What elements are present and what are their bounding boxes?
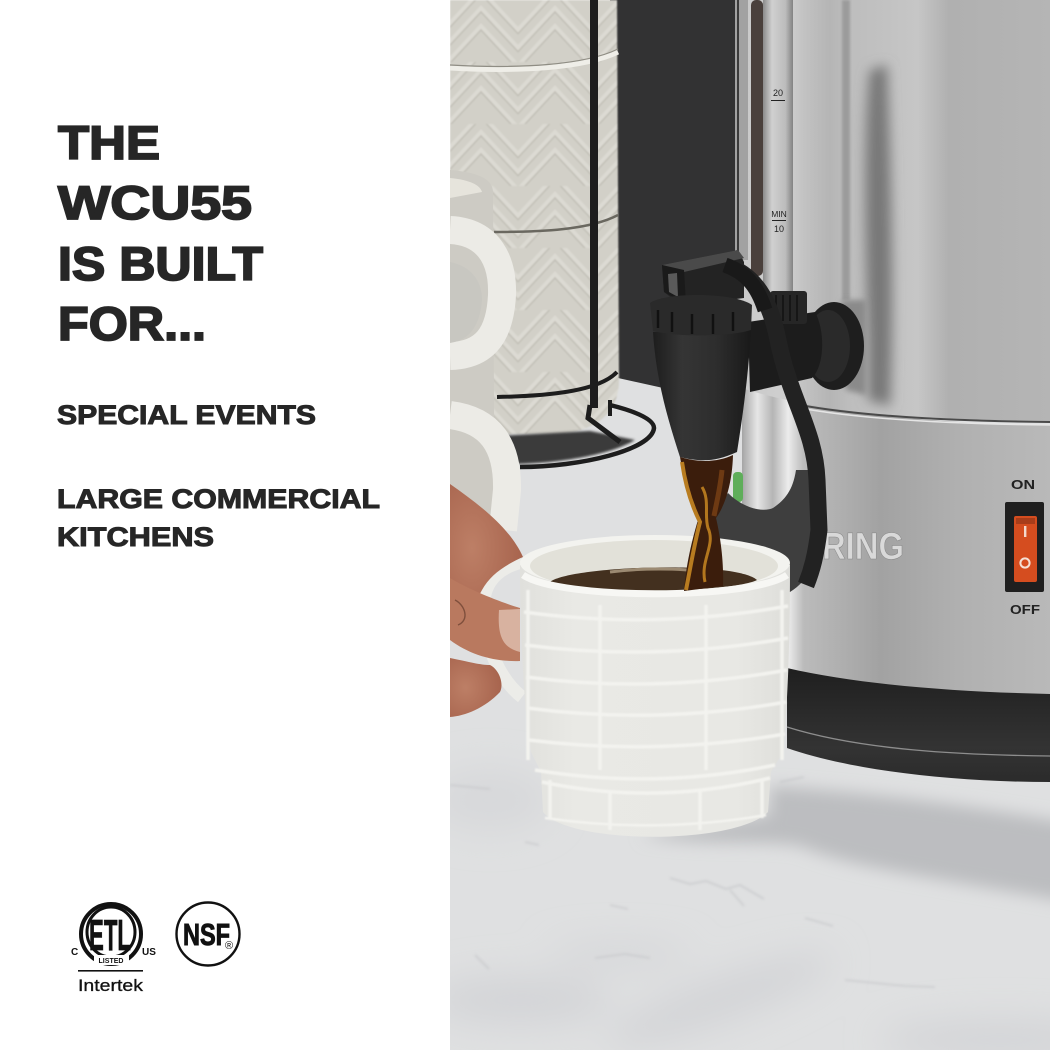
product photo scene <box>430 0 1050 1050</box>
water level sight gauge: 20 <box>773 88 783 98</box>
stainless urn upper body <box>735 0 1050 421</box>
certification logo: ETL listed Intertek: Intertek <box>78 976 144 995</box>
stacked patterned mugs <box>450 0 619 434</box>
marble counter <box>430 370 1050 1050</box>
foreground stacked mugs and handles <box>450 170 507 530</box>
certification logo: ETL listed Intertek: C <box>71 947 78 958</box>
power rocker switch: ON <box>1011 477 1035 492</box>
heading: THE <box>58 116 160 169</box>
water level sight gauge: 10 <box>774 224 784 234</box>
water level sight gauge <box>735 0 793 294</box>
urn shadow on counter <box>640 786 1050 910</box>
certification logo: ETL listed Intertek: US <box>142 947 156 958</box>
use cases list <box>57 400 380 552</box>
heading <box>58 116 263 350</box>
embossed brand lettering: RING <box>822 526 904 568</box>
black urn base <box>787 668 1050 782</box>
spigot pipe and mounting flange <box>748 291 864 392</box>
hand holding cup <box>450 484 523 717</box>
certification logo: ETL listed Intertek: LISTED <box>98 958 124 965</box>
black wire mug rack <box>497 0 654 467</box>
certification logo: NSF: NSF <box>183 917 230 952</box>
certification logo: NSF: ® <box>225 940 233 952</box>
certification logo: ETL listed Intertek: ETL <box>89 911 131 960</box>
certification logo: NSF <box>176 902 240 966</box>
heading: FOR... <box>58 297 206 350</box>
heading: WCU55 <box>58 176 252 229</box>
use cases list: SPECIAL EVENTS <box>57 400 316 430</box>
heading: IS BUILT <box>58 237 263 290</box>
power rocker switch <box>1005 477 1044 617</box>
use cases list: LARGE COMMERCIAL <box>57 484 380 514</box>
certification logo: ETL listed Intertek <box>71 904 156 995</box>
pouring coffee stream <box>680 455 733 591</box>
water level sight gauge: MIN <box>771 209 787 219</box>
tap strap with lower flap <box>716 264 828 592</box>
spout cap, collar and nozzle <box>650 250 765 460</box>
white brick-pattern cup <box>483 535 790 837</box>
power rocker switch: OFF <box>1010 602 1040 617</box>
use cases list: KITCHENS <box>57 522 214 552</box>
left white panel <box>0 0 450 1050</box>
dark wall backsplash <box>610 0 740 405</box>
stainless urn lower body <box>733 388 1050 700</box>
